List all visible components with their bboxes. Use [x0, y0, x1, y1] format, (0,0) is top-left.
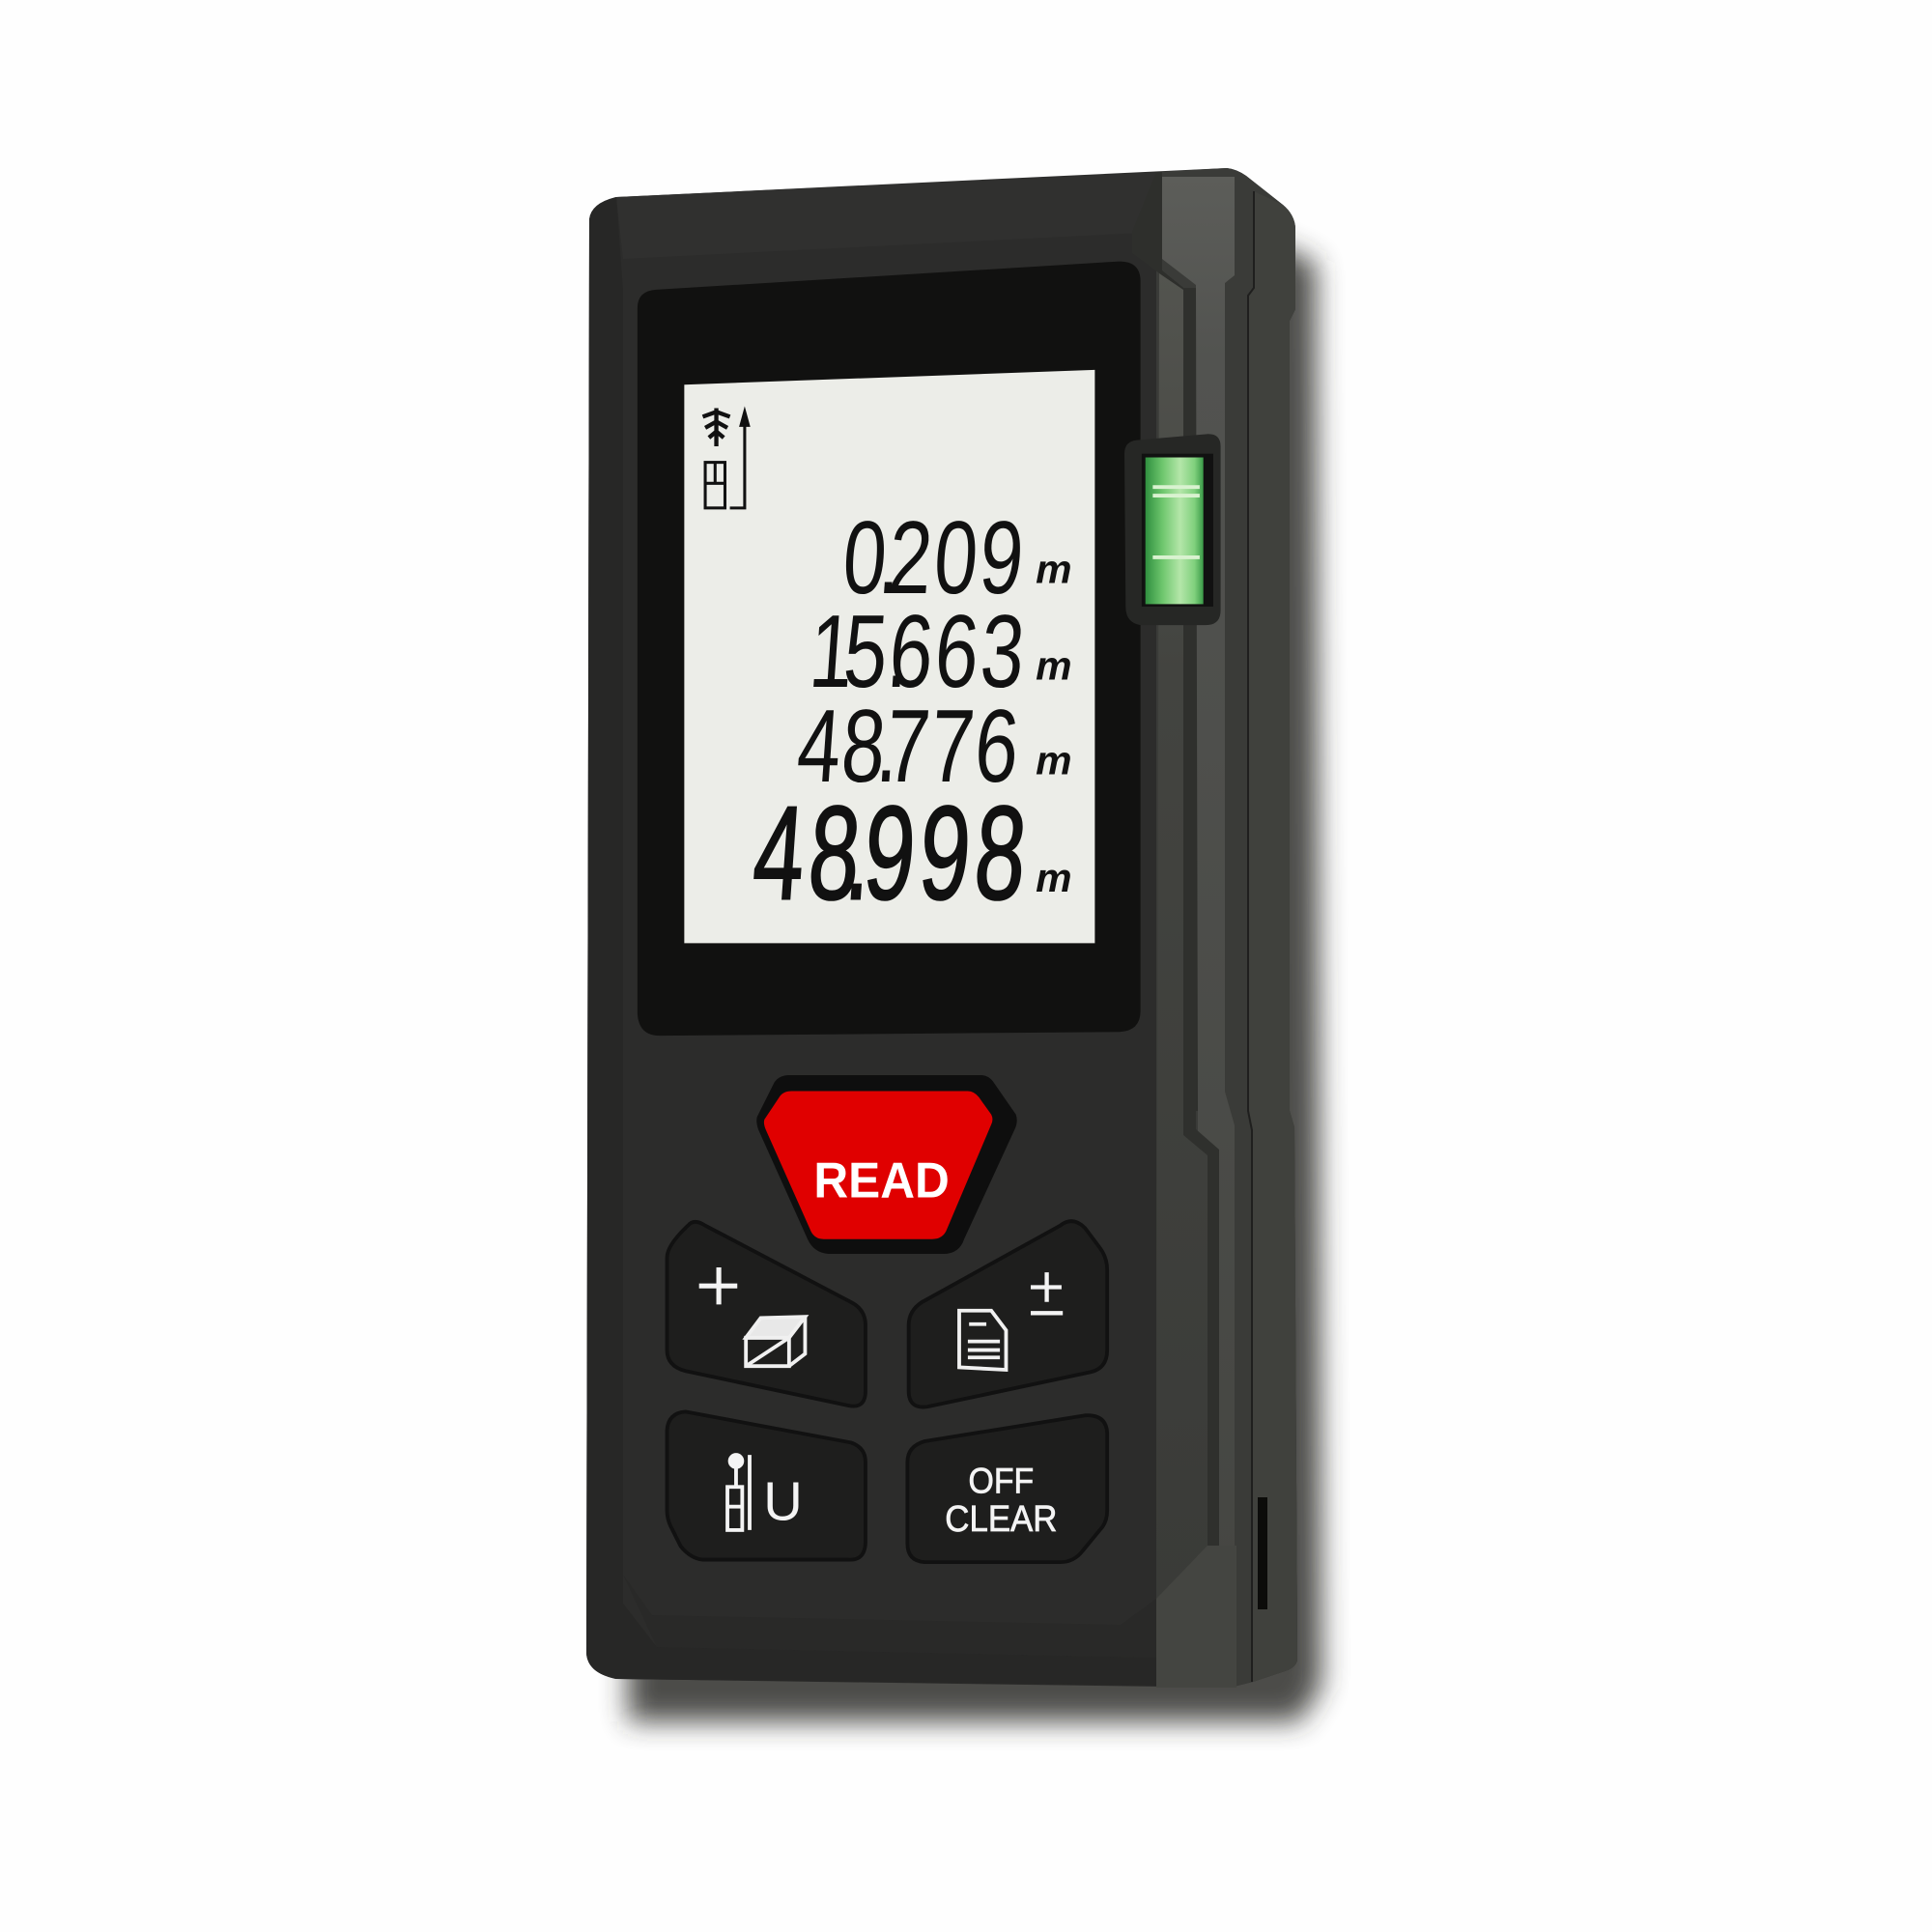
top edge strip: [616, 172, 1162, 259]
button: memory: [909, 1221, 1107, 1407]
level bubble: [1152, 487, 1200, 557]
LCD reading 1: 0.209: [839, 500, 1027, 616]
plus sign: [699, 1267, 737, 1304]
LCD background: [684, 370, 1094, 943]
document icon: [959, 1311, 1006, 1370]
LCD mode icon: [703, 408, 749, 508]
LCD screen: [684, 370, 1094, 943]
level housing: [1124, 434, 1221, 625]
READ label: READ: [813, 1152, 950, 1208]
bubble level: [1124, 434, 1221, 625]
light side stripe: [1162, 177, 1235, 1688]
unit letter U: U: [763, 1471, 803, 1532]
front lower chamfer: [623, 1575, 1156, 1658]
side groove: [1183, 288, 1219, 1546]
LCD reading 1: m: [1036, 547, 1072, 592]
body silhouette: [586, 168, 1297, 1688]
display bezel: [638, 262, 1141, 1036]
button: reference and unit: [667, 1411, 866, 1560]
level window: [1142, 454, 1213, 607]
LCD reading 2: m: [1036, 642, 1072, 688]
charge port slot: [1258, 1497, 1267, 1609]
LCD reading 2: 15.663: [806, 594, 1028, 710]
reference icon: [727, 1455, 750, 1530]
drop shadow: [628, 232, 1321, 1721]
level vial: [1146, 458, 1204, 604]
LCD reading 3: m: [1036, 738, 1072, 783]
plus-minus sign: [1031, 1272, 1063, 1313]
button: off clear: [907, 1415, 1107, 1562]
READ button face: [764, 1092, 992, 1239]
right side base: [1156, 168, 1297, 1688]
READ button surround: [756, 1075, 1017, 1254]
lower side facet: [1156, 1546, 1236, 1688]
device body: [586, 168, 1297, 1688]
LCD reading 4: m: [1036, 855, 1072, 900]
button shape: [667, 1222, 866, 1406]
outer side face: [1248, 191, 1297, 1682]
left edge strip: [586, 197, 1156, 1686]
area box icon: [746, 1317, 805, 1366]
side seam: [1248, 191, 1254, 1682]
button: add and area: [667, 1222, 866, 1406]
inner side panel: [1156, 273, 1208, 1599]
OFF label: OFF: [969, 1461, 1034, 1501]
button shape: [907, 1415, 1107, 1562]
LCD reading 4: 48.998: [749, 780, 1031, 928]
top chevron shade: [1132, 172, 1198, 1111]
READ button: [756, 1075, 1017, 1254]
CLEAR label: CLEAR: [945, 1498, 1057, 1540]
button shape: [667, 1411, 866, 1560]
LCD reading 3: 48.776: [794, 689, 1022, 805]
button shape: [909, 1221, 1107, 1407]
